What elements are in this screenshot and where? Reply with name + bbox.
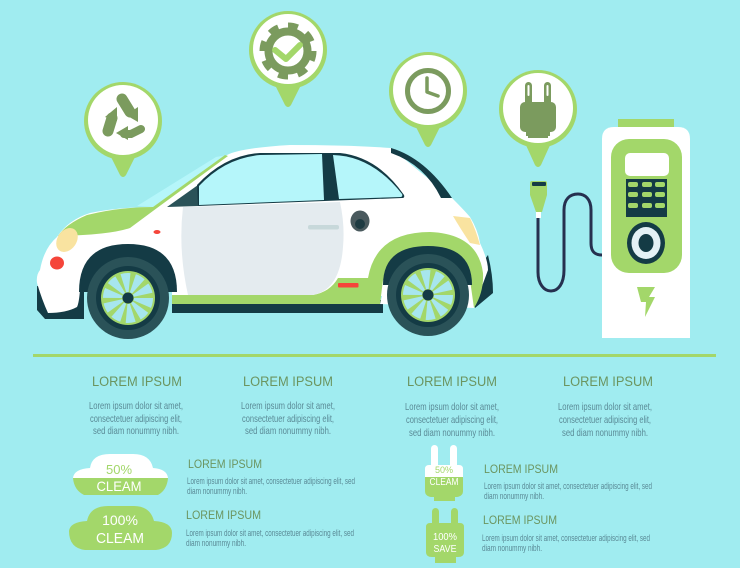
cloud badge: 100% clean: 100% xyxy=(102,512,138,528)
note 3: LOREM IPSUM xyxy=(484,464,558,476)
lightning bolt xyxy=(637,287,655,317)
pin: clock xyxy=(389,52,467,147)
front window xyxy=(199,154,324,205)
cloud badge: 50% clean: 50% xyxy=(106,462,132,477)
note 1: Lorem ipsum dolor sit amet, consectetuer adipiscing elit, sed xyxy=(187,476,355,487)
column 4 text: consectetuer adipiscing elit, xyxy=(559,414,651,426)
cloud badge: 50% clean xyxy=(73,454,168,495)
column 3 text xyxy=(405,374,499,439)
car body xyxy=(37,145,488,313)
column 2 text: LOREM IPSUM xyxy=(243,374,333,389)
roof stripe xyxy=(391,148,452,198)
column 4 text: Lorem ipsum dolor sit amet, xyxy=(558,401,652,413)
charging cable and connector xyxy=(530,181,602,291)
tail light xyxy=(453,216,480,245)
door panel xyxy=(181,202,344,295)
front wheel xyxy=(87,257,169,339)
column 1 text: Lorem ipsum dolor sit amet, xyxy=(89,400,183,412)
rear marker xyxy=(338,283,358,288)
note 3: diam nonummy nibh. xyxy=(484,491,544,502)
plug badge: 100% save: SAVE xyxy=(434,544,457,555)
red front lamp xyxy=(50,256,64,270)
door handle xyxy=(308,225,339,230)
note 2: LOREM IPSUM xyxy=(186,510,261,522)
plug badge: 50% clean: CLEAM xyxy=(430,477,458,488)
note 2: diam nonummy nibh. xyxy=(186,538,246,549)
charging socket xyxy=(627,222,665,264)
note 1 xyxy=(187,459,355,497)
green rear fender and sill xyxy=(172,232,483,308)
column 3 text: sed diam nonummy nibh. xyxy=(409,427,495,439)
note 4 xyxy=(482,515,650,554)
control panel xyxy=(611,139,682,273)
column 1 text xyxy=(89,374,183,437)
column 1 text: consectetuer adipiscing elit, xyxy=(90,413,182,425)
cloud badge: 50% clean: CLEAM xyxy=(96,478,142,494)
pin: plug xyxy=(499,70,577,167)
rear bumper xyxy=(470,255,493,308)
note 1: diam nonummy nibh. xyxy=(187,486,247,497)
cloud badge: 100% clean xyxy=(69,506,172,550)
divider xyxy=(33,354,716,357)
icon: recycle arrows xyxy=(105,99,141,140)
column 1 text: sed diam nonummy nibh. xyxy=(93,425,179,437)
green hood xyxy=(58,155,228,236)
rear window xyxy=(333,155,402,199)
front bumper xyxy=(37,286,84,319)
plug badge: 50% clean xyxy=(425,445,463,501)
headlight xyxy=(52,224,82,256)
window frame xyxy=(197,153,404,206)
note 4: diam nonummy nibh. xyxy=(482,543,542,554)
cloud badge: 100% clean: CLEAM xyxy=(96,530,144,547)
column 4 text: LOREM IPSUM xyxy=(563,374,653,389)
column 4 text: sed diam nonummy nibh. xyxy=(562,427,648,439)
column 3 text: consectetuer adipiscing elit, xyxy=(406,414,498,426)
charging station xyxy=(602,119,690,338)
screen xyxy=(625,153,669,176)
pin: recycling xyxy=(84,82,162,177)
rear wheel xyxy=(387,254,469,336)
rear wheel arch xyxy=(383,246,472,285)
note 2: Lorem ipsum dolor sit amet, consectetuer adipiscing elit, sed xyxy=(186,528,354,539)
column 2 text xyxy=(241,374,335,437)
plug badge: 50% clean: 50% xyxy=(435,465,453,475)
note 3 xyxy=(484,464,652,502)
icon: plug xyxy=(520,82,556,138)
windshield sliver xyxy=(137,155,227,207)
pin: gear with check xyxy=(249,11,327,107)
note 4: LOREM IPSUM xyxy=(483,515,557,527)
note 4: Lorem ipsum dolor sit amet, consectetuer adipiscing elit, sed xyxy=(482,533,650,544)
column 3 text: LOREM IPSUM xyxy=(407,374,497,389)
plug badge: 100% save xyxy=(426,508,464,563)
note 2 xyxy=(186,510,354,549)
column 2 text: Lorem ipsum dolor sit amet, xyxy=(241,400,335,412)
fuel cap xyxy=(350,210,370,232)
electric car xyxy=(37,145,493,339)
column 3 text: Lorem ipsum dolor sit amet, xyxy=(405,401,499,413)
note 1: LOREM IPSUM xyxy=(188,459,262,471)
column 2 text: sed diam nonummy nibh. xyxy=(245,425,331,437)
front wheel arch xyxy=(79,244,177,292)
column 2 text: consectetuer adipiscing elit, xyxy=(242,413,334,425)
column 1 text: LOREM IPSUM xyxy=(92,374,182,389)
column 4 text xyxy=(558,374,653,439)
front pillar xyxy=(167,185,198,207)
plug badge: 100% save: 100% xyxy=(433,532,457,543)
note 3: Lorem ipsum dolor sit amet, consectetuer adipiscing elit, sed xyxy=(484,481,652,492)
keypad xyxy=(626,179,667,217)
side marker xyxy=(154,230,160,234)
icon: clock xyxy=(408,70,448,112)
sill xyxy=(172,300,383,313)
icon: gear xyxy=(262,26,314,76)
